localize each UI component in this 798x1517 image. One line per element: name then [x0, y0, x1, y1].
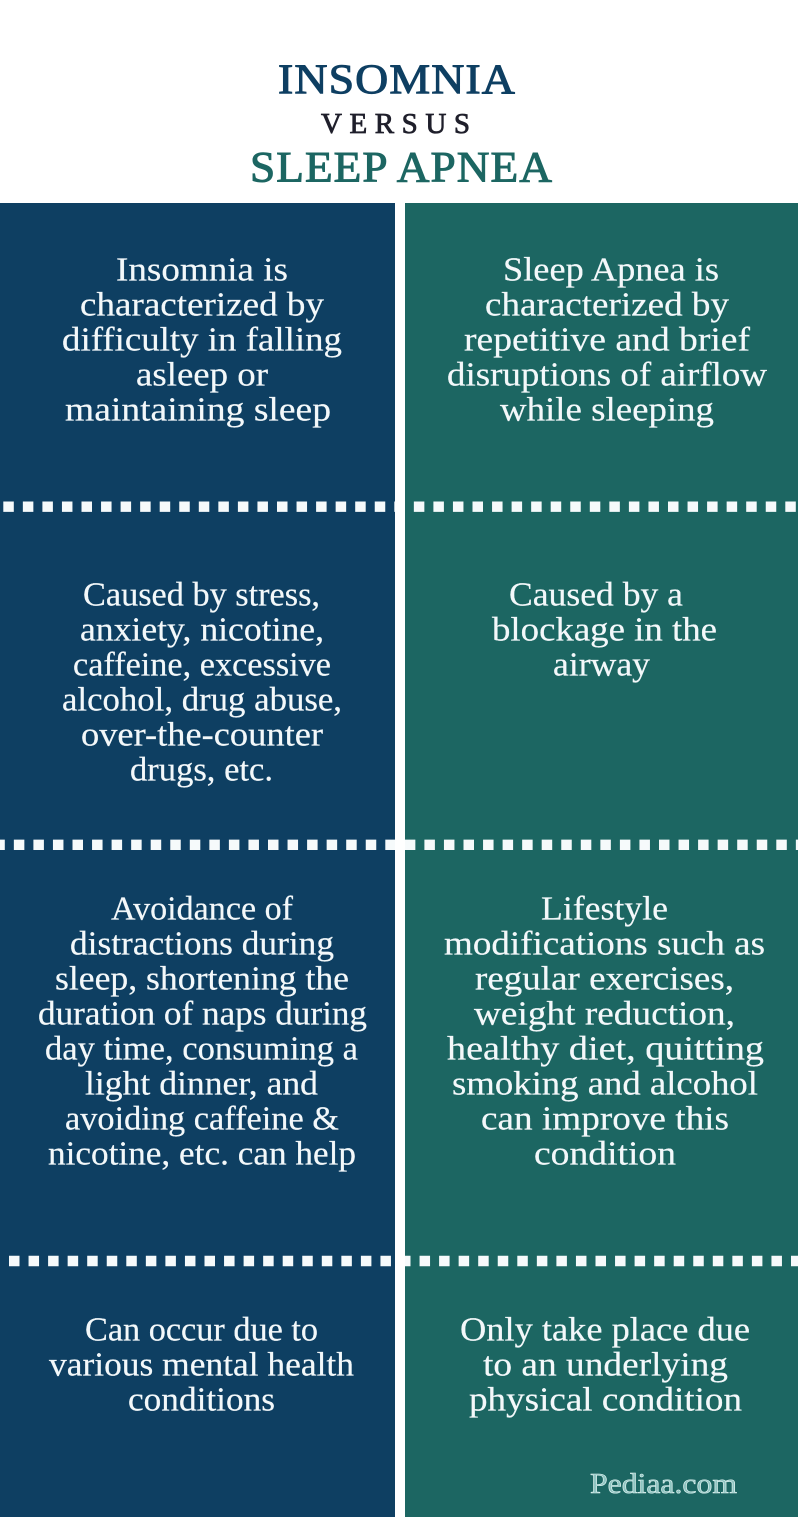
panel: definition, insomnia: difficulty in falling: [62, 322, 342, 358]
panel: origin, insomnia: various mental health: [49, 1346, 354, 1384]
panel: causes, insomnia: alcohol, drug abuse,: [62, 682, 342, 718]
logo: Pediaa.com: Pediaa.com: [590, 1469, 737, 1500]
panel: management, sleep apnea: healthy diet, quitting: [447, 1030, 764, 1068]
heading: Insomnia: INSOMNIA: [278, 58, 516, 104]
panel: causes, insomnia: anxiety, nicotine,: [80, 612, 324, 648]
panel: management, sleep apnea: Lifestyle: [541, 890, 668, 928]
panel: management, sleep apnea: [405, 845, 798, 1261]
panel: origin, insomnia: [0, 1261, 395, 1517]
panel: definition, insomnia: asleep or: [136, 356, 268, 394]
panel: definition, insomnia: [0, 203, 395, 506]
panel: management, insomnia: duration of naps during: [38, 996, 367, 1032]
panel: causes, insomnia: over-the-counter: [81, 716, 323, 754]
panel: causes, sleep apnea: [405, 506, 798, 845]
panel: definition, insomnia: Insomnia is: [116, 252, 288, 288]
panel: origin, insomnia: conditions: [128, 1382, 275, 1418]
panel: management, insomnia: nicotine, etc. can help: [48, 1136, 356, 1172]
panel: management, sleep apnea: modifications such as: [444, 926, 765, 962]
panel: definition, sleep apnea: while sleeping: [500, 392, 714, 428]
panel: management, sleep apnea: condition: [534, 1136, 676, 1172]
panel: management, insomnia: light dinner, and: [85, 1066, 318, 1102]
panel: origin, sleep apnea: to an underlying: [483, 1346, 728, 1384]
title: [250, 58, 553, 192]
panel: management, sleep apnea: smoking and alcohol: [452, 1066, 758, 1102]
panel: definition, sleep apnea: disruptions of airflow: [447, 356, 768, 394]
panel: definition, sleep apnea: repetitive and brief: [464, 322, 751, 358]
panel: management, insomnia: distractions during: [70, 926, 334, 962]
panel: management, insomnia: day time, consuming a: [45, 1030, 358, 1068]
panel: definition, sleep apnea: characterized by: [485, 286, 729, 324]
panel: causes, insomnia: drugs, etc.: [130, 752, 273, 788]
panel: management, sleep apnea: weight reduction,: [474, 996, 735, 1032]
panel: causes, insomnia: Caused by stress,: [83, 576, 320, 614]
panel: definition, sleep apnea: [405, 203, 798, 506]
panel: management, insomnia: [0, 845, 395, 1261]
panel: definition, insomnia: maintaining sleep: [65, 392, 331, 428]
panel: causes, sleep apnea: Caused by a: [509, 576, 683, 614]
panel: causes, insomnia: caffeine, excessive: [73, 646, 331, 684]
panel: management, insomnia: avoiding caffeine &: [65, 1100, 339, 1138]
panel: management, sleep apnea: can improve this: [481, 1100, 729, 1138]
panel: management, sleep apnea: regular exercises,: [475, 960, 734, 998]
panel: definition, sleep apnea: Sleep Apnea is: [503, 252, 719, 288]
panel: origin, sleep apnea: physical condition: [469, 1382, 742, 1418]
heading: Sleep Apnea: SLEEP APNEA: [250, 144, 553, 192]
panel: definition, insomnia: characterized by: [80, 286, 324, 324]
panel: causes, insomnia: [0, 506, 395, 845]
panel: origin, insomnia: Can occur due to: [85, 1312, 318, 1348]
panel: origin, sleep apnea: Only take place due: [460, 1312, 750, 1348]
panel: management, insomnia: Avoidance of: [111, 890, 294, 928]
panel: origin, sleep apnea: [405, 1261, 798, 1517]
panel: management, insomnia: sleep, shortening the: [55, 960, 349, 998]
heading: versus: VERSUS: [321, 108, 470, 140]
panel: causes, sleep apnea: airway: [553, 646, 650, 684]
panel: causes, sleep apnea: blockage in the: [492, 612, 717, 648]
